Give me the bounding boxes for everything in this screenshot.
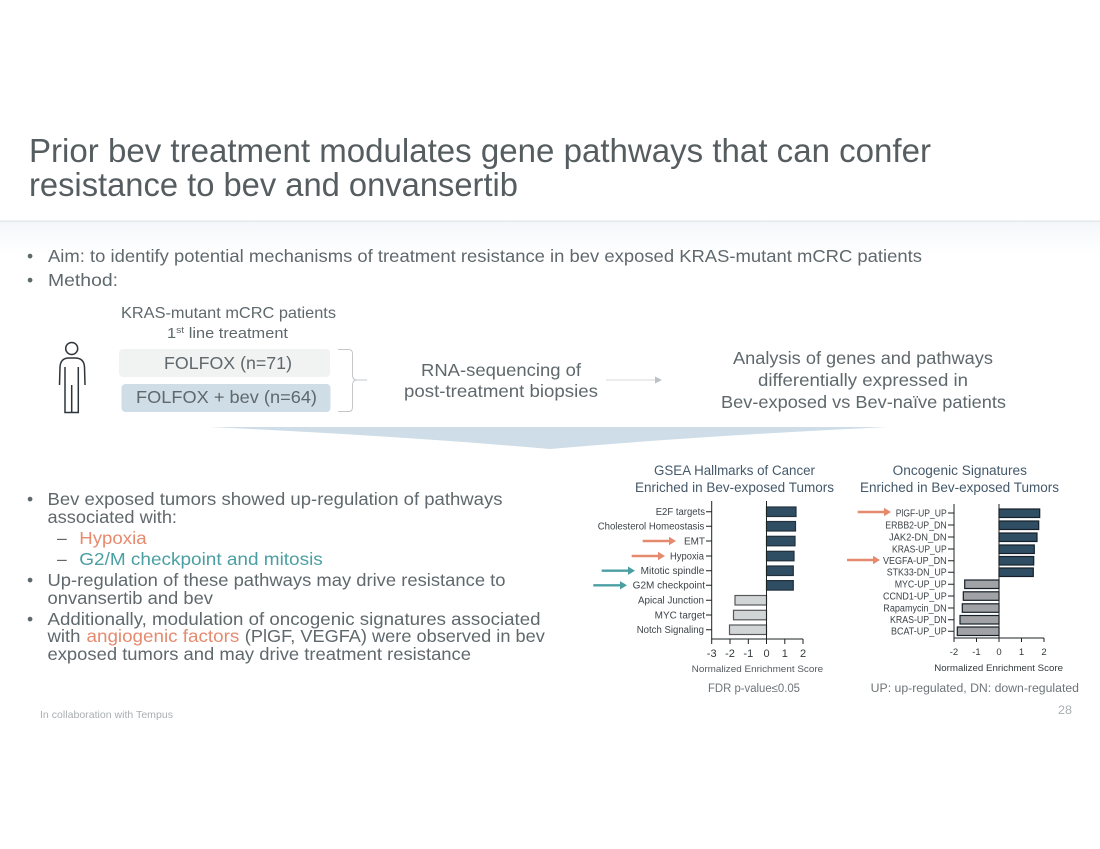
arrow: VEGFA bbox=[847, 556, 880, 564]
findings bullets: • bbox=[27, 609, 33, 629]
category labels bbox=[598, 507, 705, 636]
axis tick labels: -3 bbox=[707, 648, 717, 660]
FDR note: FDR p-value≤0.05 bbox=[708, 683, 800, 695]
axis tick labels: 0 bbox=[763, 648, 770, 660]
category labels: EMT bbox=[684, 536, 705, 547]
category labels: KRAS-UP_UP bbox=[892, 544, 947, 555]
analysis text bbox=[721, 348, 1006, 412]
pill: FOLFOX arm: FOLFOX (n=71) bbox=[164, 353, 292, 373]
category labels: E2F targets bbox=[656, 507, 705, 518]
cohort heading bbox=[121, 305, 336, 342]
title bbox=[29, 132, 931, 203]
findings bullets: – bbox=[57, 549, 67, 569]
footer credit: In collaboration with Tempus bbox=[40, 709, 173, 721]
banner arrow bbox=[210, 427, 888, 449]
finding: G2/M checkpoint: G2/M checkpoint and mitosis bbox=[79, 549, 323, 569]
category labels: Notch Signaling bbox=[637, 625, 704, 636]
bars bbox=[730, 507, 796, 634]
aim and method bullets bbox=[27, 246, 922, 290]
axis tick labels bbox=[707, 648, 806, 660]
axis tick labels: 1 bbox=[1019, 647, 1024, 658]
axis tick labels: -2 bbox=[950, 647, 958, 658]
category labels: G2M checkpoint bbox=[633, 581, 705, 592]
title: resistance to bev and onvansertib bbox=[29, 166, 518, 203]
page number: 28 bbox=[1058, 703, 1072, 717]
findings bullets: (PlGF, VEGFA) were observed in bev bbox=[245, 626, 545, 646]
findings bullets: – bbox=[57, 528, 67, 548]
arrow: G2M checkpoint bbox=[593, 581, 627, 590]
findings bullets bbox=[27, 489, 545, 664]
category labels: KRAS-UP_DN bbox=[890, 615, 947, 626]
bracket bbox=[338, 350, 367, 412]
category labels: Mitotic spindle bbox=[641, 566, 705, 577]
cohort heading: KRAS-mutant mCRC patients bbox=[121, 305, 336, 322]
chart title: Oncogenic Signatures bbox=[893, 463, 1027, 478]
pill: FOLFOX + bev arm bbox=[122, 384, 330, 412]
chart: GSEA hallmarks bbox=[593, 463, 834, 675]
category labels: JAK2-DN_DN bbox=[889, 532, 947, 543]
RNA-sequencing text bbox=[404, 360, 598, 401]
analysis text: Bev-exposed vs Bev-naïve patients bbox=[721, 392, 1006, 412]
axes bbox=[706, 501, 803, 644]
pill: FOLFOX + bev arm: FOLFOX + bev (n=64) bbox=[136, 387, 317, 407]
bars bbox=[957, 509, 1040, 636]
axis tick labels: -1 bbox=[972, 647, 981, 658]
finding: hypoxia: Hypoxia bbox=[79, 528, 147, 548]
findings bullets: associated with: bbox=[48, 507, 177, 527]
pill: FOLFOX arm bbox=[119, 349, 330, 377]
arrow: Hypoxia bbox=[632, 552, 665, 560]
findings bullets: • bbox=[27, 489, 33, 509]
findings bullets: Bev exposed tumors showed up-regulation of pathways bbox=[48, 489, 503, 509]
aim and method bullets: Method: bbox=[48, 270, 118, 290]
category labels bbox=[883, 508, 947, 638]
category labels: MYC target bbox=[655, 610, 705, 621]
findings bullets: Additionally, modulation of oncogenic signatures associated bbox=[48, 609, 540, 629]
category labels: ERBB2-UP_DN bbox=[885, 520, 947, 531]
findings bullets: with bbox=[46, 626, 80, 646]
chart: oncogenic signatures bbox=[847, 463, 1063, 674]
finding: angiogenic factors: angiogenic factors bbox=[86, 626, 240, 646]
chart title bbox=[635, 463, 834, 495]
axis tick labels bbox=[950, 647, 1047, 658]
cohort heading: line treatment bbox=[184, 325, 289, 342]
category labels: Hypoxia bbox=[670, 551, 705, 562]
legend note: UP: up-regulated, DN: down-regulated bbox=[871, 683, 1079, 695]
aim and method bullets: • bbox=[27, 270, 33, 290]
icon: patient figure bbox=[60, 342, 85, 412]
title: Prior bev treatment modulates gene pathways that can confer bbox=[29, 132, 931, 169]
axis tick labels: 0 bbox=[996, 647, 1002, 658]
findings bullets: • bbox=[27, 570, 33, 590]
category labels: STK33-DN_UP bbox=[887, 568, 947, 579]
arrow: Mitotic spindle bbox=[602, 566, 635, 575]
analysis text: differentially expressed in bbox=[758, 370, 968, 390]
axis title: Normalized Enrichment Score bbox=[692, 664, 823, 675]
arrow: PlGF bbox=[858, 508, 891, 516]
axis tick labels: -1 bbox=[743, 648, 753, 660]
category labels: CCND1-UP_UP bbox=[883, 591, 947, 602]
category labels: Cholesterol Homeostasis bbox=[598, 522, 704, 533]
axis tick labels: 2 bbox=[1041, 647, 1047, 658]
aim and method bullets: Aim: to identify potential mechanisms of treatment resistance in bev exposed KRAS-mutant mCRC patients bbox=[48, 246, 922, 266]
axis tick labels: -2 bbox=[725, 648, 735, 660]
cohort heading: st bbox=[176, 325, 185, 336]
aim and method bullets: • bbox=[27, 246, 33, 266]
axis tick labels: 2 bbox=[800, 648, 806, 660]
findings bullets: onvansertib and bev bbox=[48, 588, 213, 608]
findings bullets: exposed tumors and may drive treatment resistance bbox=[48, 644, 471, 664]
chart title: Enriched in Bev-exposed Tumors bbox=[860, 480, 1059, 495]
category labels: Apical Junction bbox=[638, 596, 704, 607]
RNA-sequencing text: RNA-sequencing of bbox=[421, 360, 581, 380]
chart title: GSEA Hallmarks of Cancer bbox=[654, 463, 815, 478]
arrow: sequencing to analysis bbox=[606, 376, 662, 384]
cohort heading: 1 bbox=[167, 325, 175, 342]
axes bbox=[948, 504, 1044, 642]
RNA-sequencing text: post-treatment biopsies bbox=[404, 381, 598, 401]
category labels: BCAT-UP_UP bbox=[891, 627, 947, 638]
arrow: EMT bbox=[643, 537, 676, 545]
analysis text: Analysis of genes and pathways bbox=[733, 348, 993, 368]
category labels: PlGF-UP_UP bbox=[896, 508, 947, 519]
findings bullets: Up-regulation of these pathways may drive resistance to bbox=[48, 570, 506, 590]
chart title bbox=[860, 463, 1059, 495]
axis tick labels: 1 bbox=[782, 648, 788, 660]
category labels: MYC-UP_UP bbox=[895, 580, 947, 591]
axis title: Normalized Enrichment Score bbox=[934, 663, 1063, 674]
category labels: VEGFA-UP_DN bbox=[883, 556, 947, 567]
chart title: Enriched in Bev-exposed Tumors bbox=[635, 480, 834, 495]
category labels: Rapamycin_DN bbox=[883, 603, 947, 614]
